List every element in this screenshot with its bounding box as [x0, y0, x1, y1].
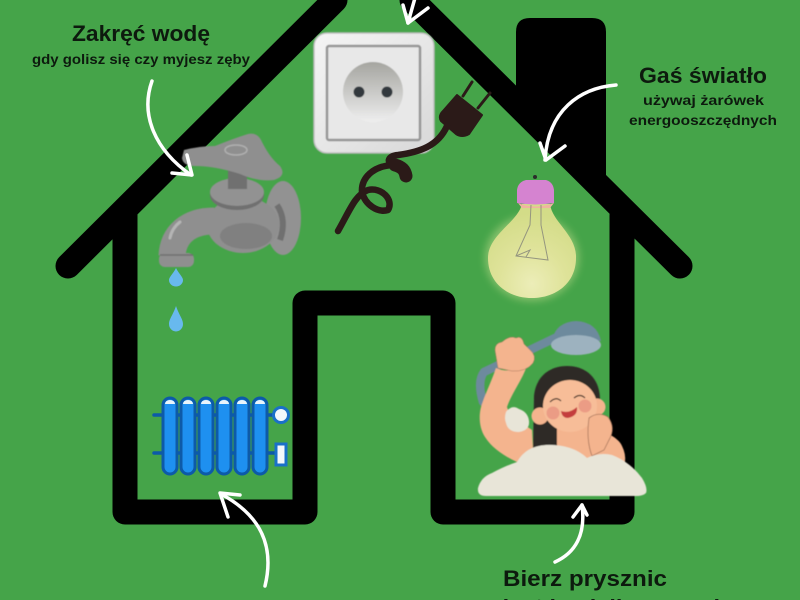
heading: turn off water: gdy golisz się czy myjesz zęby	[32, 52, 251, 67]
icon: woman in shower	[478, 321, 646, 496]
foam	[478, 445, 646, 496]
house outline	[68, 0, 680, 512]
arrow: to shower	[555, 505, 587, 562]
heading: take a shower	[457, 566, 734, 600]
heading: turn off water: Zakręć wodę	[72, 21, 210, 46]
icon: light bulb	[485, 175, 579, 301]
icon: water drops	[169, 268, 183, 332]
heading: turn off light: Gaś światło	[639, 63, 767, 88]
cheeks	[546, 406, 560, 420]
heading: turn off light	[629, 63, 777, 128]
shower plate	[551, 335, 601, 355]
icon: radiator	[154, 398, 288, 474]
torso	[557, 424, 625, 474]
armpit foam	[505, 407, 529, 432]
fist	[495, 337, 534, 371]
arrow: to bulb	[540, 85, 616, 160]
ears	[532, 408, 548, 424]
face	[543, 380, 597, 432]
shower hose and handle	[480, 338, 555, 402]
shower head	[552, 321, 601, 341]
hair	[533, 366, 600, 448]
raised arm	[480, 362, 533, 462]
icon: tap	[159, 134, 301, 267]
arrow: to tap	[148, 81, 192, 175]
arrow: to radiator	[220, 493, 268, 586]
eyes	[550, 396, 585, 402]
icon: plug and cord	[338, 82, 490, 231]
heading: take a shower: Bierz prysznic	[503, 566, 667, 591]
heading: turn off light: używaj żarówek	[643, 93, 765, 108]
heading: turn off water	[32, 21, 251, 67]
icon: wall socket	[314, 33, 434, 153]
arrow: to socket	[403, 0, 428, 23]
hand at cheek	[588, 414, 612, 456]
mouth	[561, 407, 577, 418]
heading: turn off light: energooszczędnych	[629, 113, 777, 128]
